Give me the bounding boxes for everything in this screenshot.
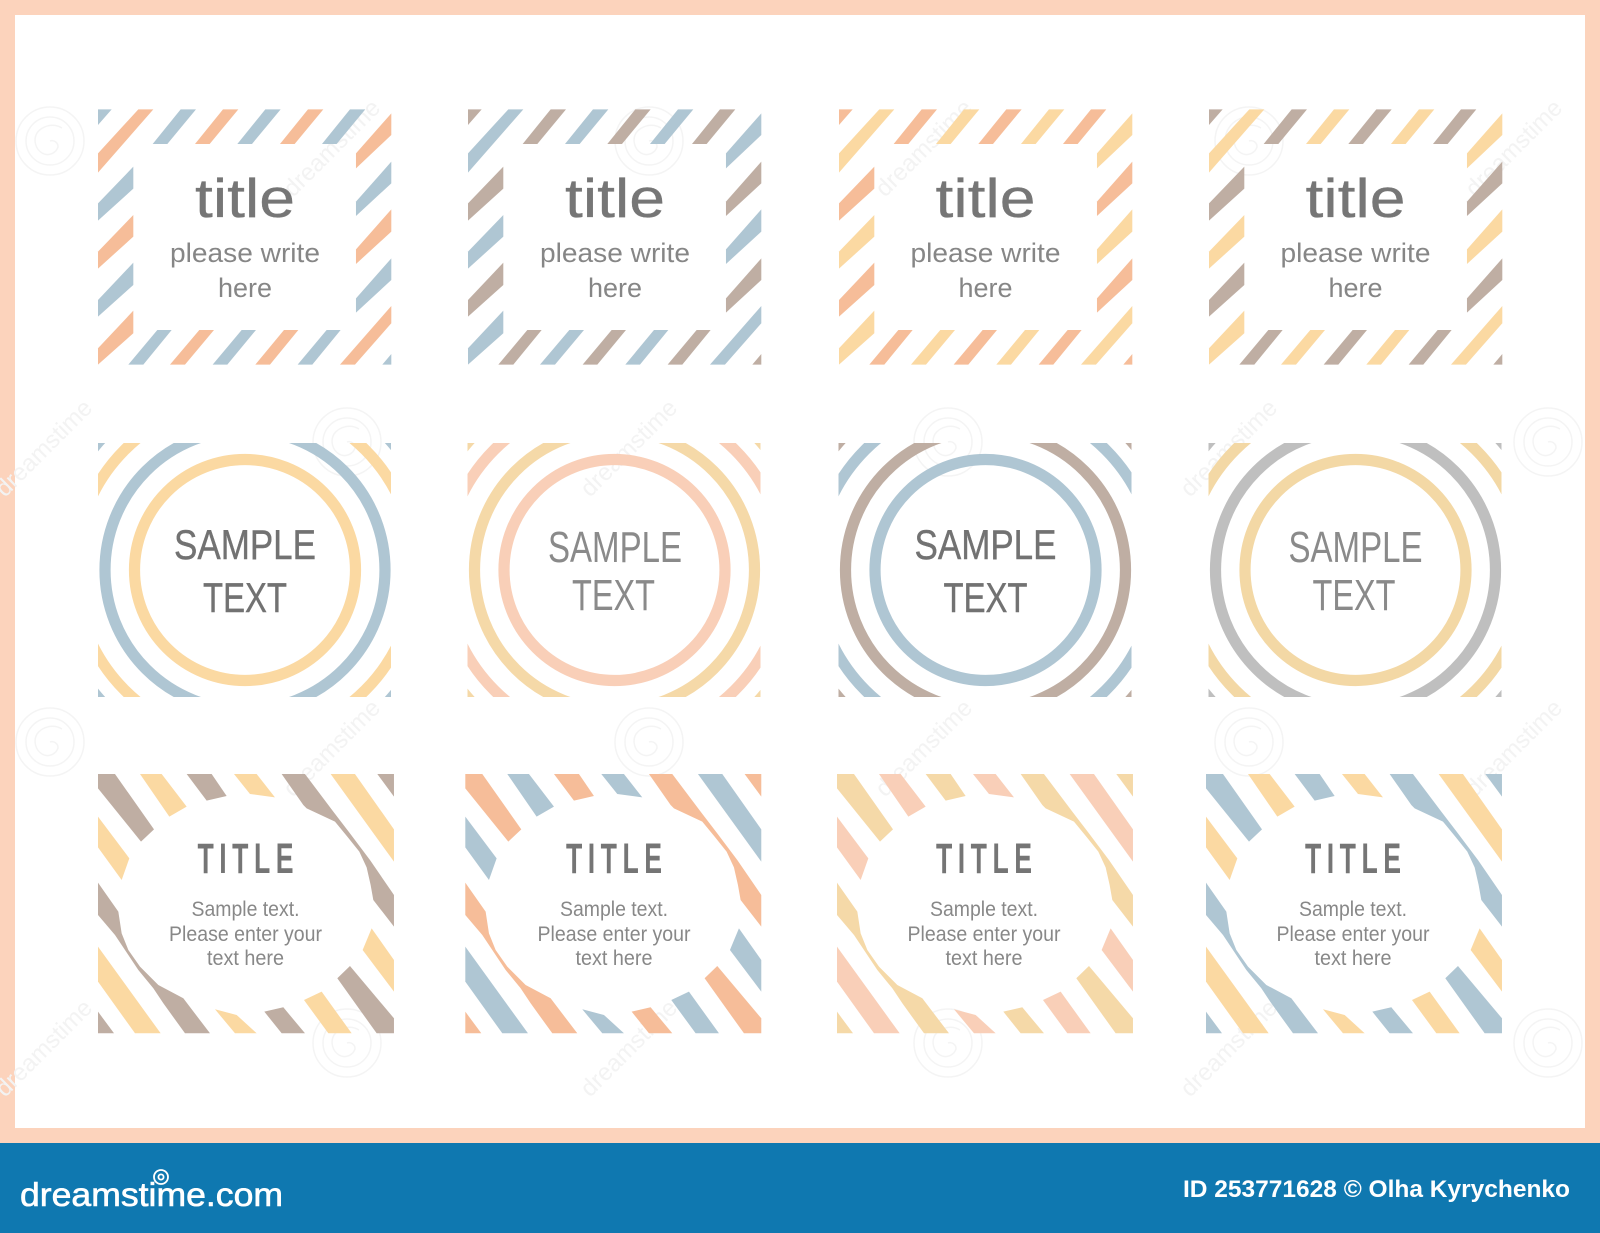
panel: row 2 card 2: SAMPLE: [548, 523, 682, 572]
panel: row 3 card 2: Please enter your: [538, 923, 690, 946]
watermark text: dreamstime: [575, 994, 683, 1102]
panel: row 3 card 1: Please enter your: [169, 923, 322, 946]
panel: row 3 card 2: [465, 774, 761, 1033]
watermark text: dreamstime: [870, 94, 978, 202]
panel: row 3 card 4: Sample text.: [1299, 898, 1407, 921]
panel: row 3 card 1: text here: [207, 947, 284, 970]
watermark text: dreamstime: [1460, 94, 1568, 202]
panel: row 3 card 1: TITLE: [197, 835, 294, 883]
panel: row 3 card 2: Sample text.: [560, 898, 668, 921]
watermark spirals: [16, 107, 1582, 1077]
panel: row 3 card 3: text here: [946, 947, 1022, 970]
panel: row 3 card 1: [98, 774, 394, 1033]
panel: row 3 card 3: TITLE: [936, 835, 1032, 883]
panel: row 3 card 3: [837, 774, 1133, 1033]
watermark text: dreamstime: [278, 694, 386, 802]
logo text: dreamstime.com: [20, 1176, 283, 1213]
watermark text: dreamstime: [870, 694, 978, 802]
panel: row 1 card 2: [468, 109, 761, 365]
panel: row 1 card 2: please write: [540, 238, 690, 268]
panel: row 1 card 3: title: [936, 167, 1036, 229]
icon: logo spiral: [154, 1170, 168, 1184]
panel: row 1 card 2: here: [588, 273, 642, 303]
panel: row 3 card 4: text here: [1314, 947, 1392, 970]
panel: row 2 card 2: [420, 376, 809, 764]
panel: row 3 card 4: Please enter your: [1276, 923, 1430, 946]
panel: row 1 card 3: please write: [910, 238, 1060, 268]
watermark text: dreamstime: [1175, 394, 1283, 502]
panel: row 3 card 2: text here: [576, 947, 652, 970]
panel: row 3 card 4: TITLE: [1305, 835, 1401, 883]
panel: row 2 card 4: SAMPLE: [1288, 523, 1422, 572]
footer bar: [0, 1143, 1600, 1233]
panel: row 2 card 4: [1161, 376, 1550, 764]
watermark text: dreamstime: [1175, 994, 1283, 1102]
panel: row 2 card 1: SAMPLE: [174, 521, 316, 568]
panel: row 1 card 1: here: [218, 273, 272, 303]
panel: row 3 card 3: Please enter your: [908, 923, 1060, 946]
panel: row 2 card 4: TEXT: [1312, 571, 1396, 620]
panel: row 3 card 1: Sample text.: [192, 898, 300, 921]
panel: row 1 card 4: please write: [1280, 238, 1430, 268]
watermark text: dreamstime: [1460, 694, 1568, 802]
panel: row 1 card 3: here: [958, 273, 1012, 303]
panel: row 2 card 3: [791, 376, 1180, 764]
credit text: ID 253771628 © Olha Kyrychenko: [1183, 1176, 1570, 1203]
panel: row 3 card 4: [1206, 774, 1502, 1033]
panel: row 3 card 3: Sample text.: [930, 898, 1038, 921]
panel: row 3 card 2: TITLE: [566, 835, 662, 883]
panel: row 1 card 2: title: [565, 167, 665, 229]
panel: row 1 card 3: [839, 109, 1132, 365]
panel: row 1 card 1: [98, 109, 391, 365]
watermark text: dreamstime: [575, 394, 683, 502]
panel: row 2 card 2: TEXT: [572, 571, 655, 620]
panel: row 1 card 1: please write: [170, 238, 320, 268]
panel: row 2 card 1: TEXT: [203, 574, 287, 621]
panel: row 2 card 1: [50, 376, 440, 764]
panel: row 1 card 4: here: [1328, 273, 1382, 303]
panel: row 1 card 4: title: [1306, 167, 1406, 229]
watermark text: dreamstime: [278, 94, 386, 202]
panel: row 2 card 3: TEXT: [944, 574, 1028, 621]
panel: row 1 card 1: title: [195, 167, 295, 229]
panel: row 1 card 4: [1209, 109, 1502, 365]
panel: row 2 card 3: SAMPLE: [914, 521, 1056, 568]
